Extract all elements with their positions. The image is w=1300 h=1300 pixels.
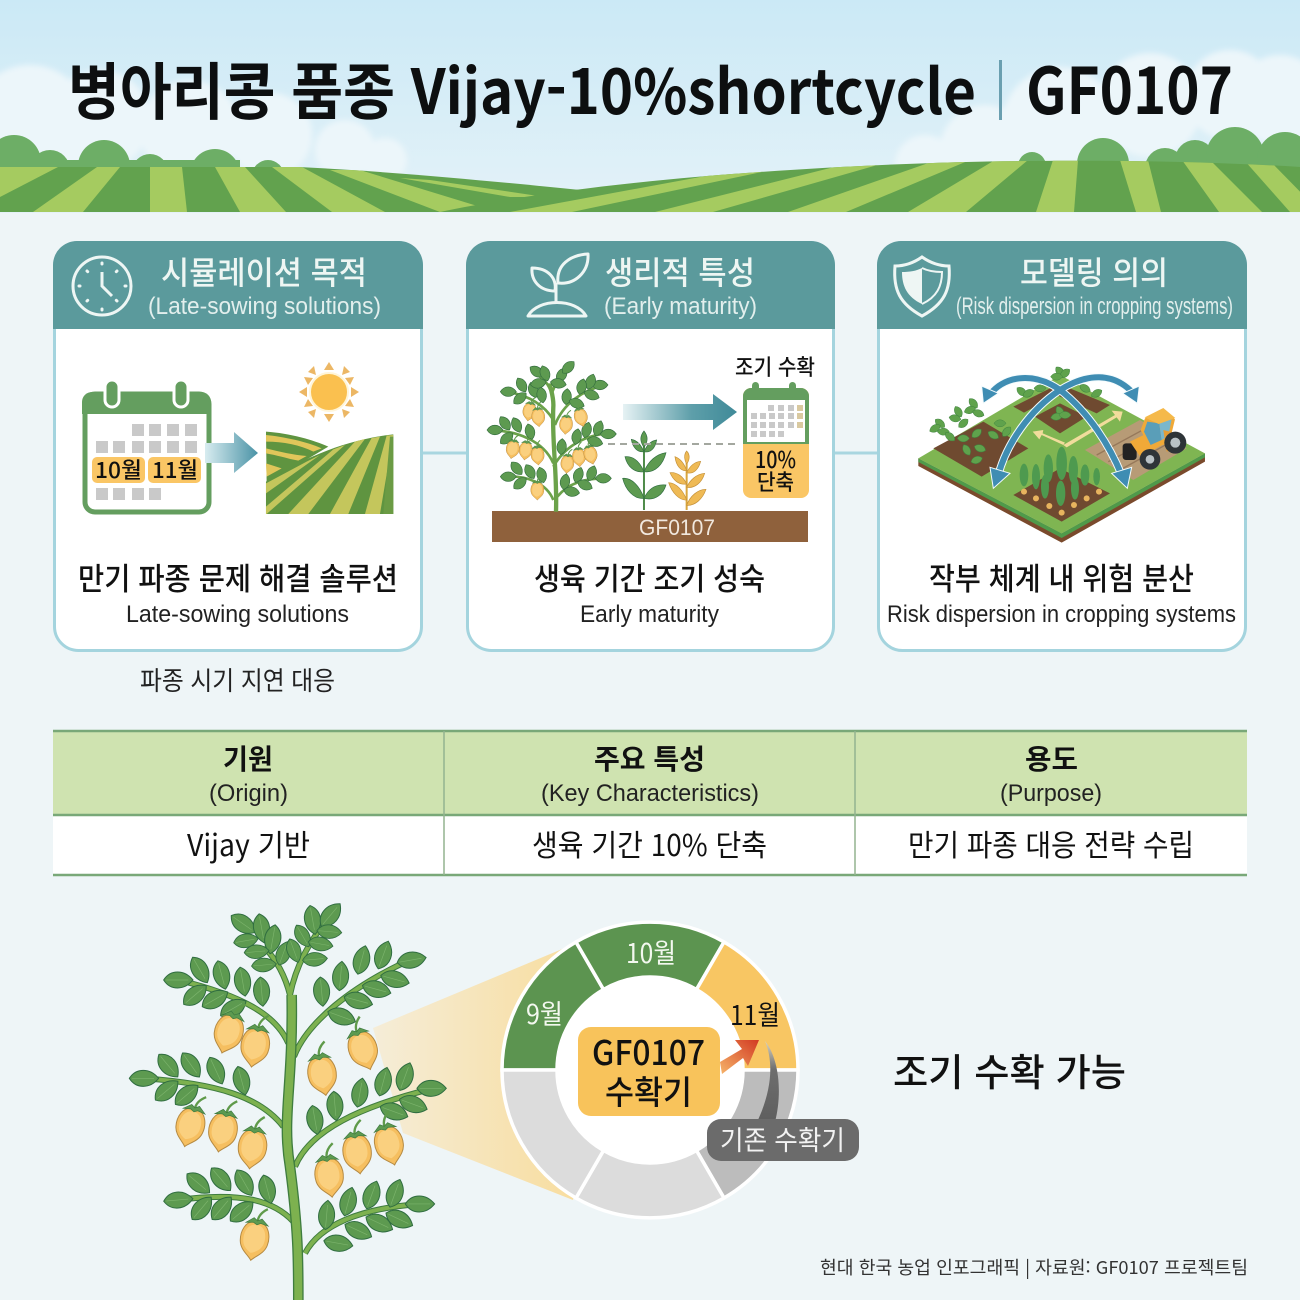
card subheading: (Late-sowing solutions) (148, 293, 381, 320)
column: purpose (908, 738, 1194, 865)
existing harvest label: 기존 수확기 (720, 1119, 845, 1158)
early harvest label: 조기 수확 (735, 350, 815, 382)
tractor (1123, 408, 1186, 470)
early harvest statement: 조기 수확 가능 (893, 1042, 1126, 1097)
segment: November (696, 942, 798, 1070)
row crop plants (1020, 447, 1100, 506)
panel: modeling significance (877, 241, 1247, 650)
soil label: GF0107 (639, 515, 715, 540)
tree lines (0, 127, 1300, 199)
footer credit: 현대 한국 농업 인포그래픽 | 자료원: GF0107 프로젝트팀 (820, 1254, 1248, 1280)
field illustration (266, 432, 393, 514)
connector lines between cards (422, 452, 878, 454)
isometric farm illustration (918, 365, 1205, 543)
column: origin: Vijay 기반 (187, 821, 310, 865)
pale path arrows (1033, 411, 1123, 447)
card English caption: Early maturity (580, 601, 719, 628)
column: key characteristics (532, 738, 767, 865)
card English caption: Late-sowing solutions (126, 601, 349, 628)
GF0107 harvest box: 수확기 (605, 1066, 692, 1114)
mini calendar with 10% shortening: 단축 (757, 465, 794, 497)
mini calendar with 10% shortening (743, 384, 809, 498)
segment: October (576, 922, 724, 990)
card heading: 생리적 특성 (605, 248, 755, 294)
left field (0, 167, 578, 212)
comparison table (53, 731, 1247, 875)
panel: simulation purpose (53, 241, 423, 650)
calendar icon (82, 380, 211, 512)
month labels: 11월 (730, 994, 780, 1033)
month labels: 9월 (526, 993, 563, 1032)
gray pointer to existing harvest (757, 1041, 779, 1122)
month labels: 10월 (626, 932, 676, 971)
header sky and farmland banner (0, 0, 1300, 215)
column: origin (187, 738, 310, 865)
icon: sprout (528, 254, 588, 316)
card heading: 모델링 의의 (1020, 248, 1168, 294)
height dashed guide (608, 443, 740, 445)
segment: September (502, 942, 604, 1070)
card subheading: (Early maturity) (604, 293, 757, 320)
icon: shield (895, 257, 949, 316)
card heading: 시뮬레이션 목적 (161, 248, 367, 294)
clouds (0, 50, 1300, 195)
card English caption: Risk dispersion in cropping systems (887, 601, 1236, 628)
GF0107 harvest box (578, 1026, 720, 1116)
mini calendar with 10% shortening: 10% (755, 441, 796, 475)
arrow (205, 432, 258, 473)
panel: physiological traits (466, 241, 835, 650)
icon: clock (73, 257, 131, 315)
calendar icon: 10월 (95, 453, 142, 485)
title: 병아리콩 품종 Vijay-10%shortcycle (68, 42, 976, 132)
calendar icon: 11월 (152, 453, 198, 485)
column: purpose: 용도 (1025, 738, 1078, 778)
icon: sun (299, 362, 359, 422)
GF0107 harvest box: GF0107 (592, 1026, 705, 1075)
large chickpea plant (129, 899, 446, 1300)
harvest calendar ring (502, 922, 798, 1218)
title: GF0107 (1026, 41, 1233, 133)
red arrow (720, 1040, 759, 1074)
green and yellow seedlings (623, 431, 706, 510)
growth arrow (623, 394, 737, 430)
column: key characteristics: 생육 기간 10% 단축 (532, 821, 767, 865)
column: origin: 기원 (223, 738, 273, 778)
card caption: 작부 체계 내 위험 분산 (929, 554, 1194, 599)
column: purpose: 만기 파종 대응 전략 수립 (908, 821, 1194, 865)
month labels (526, 932, 780, 1033)
highlight cone from plant to ring (373, 947, 600, 1200)
card caption: 생육 기간 조기 성숙 (534, 554, 765, 599)
column: origin: (Origin) (209, 780, 288, 807)
soil band (492, 511, 808, 542)
right field (440, 160, 1300, 212)
chickpea plant (487, 358, 616, 512)
column: key characteristics: (Key Characteristics) (541, 780, 759, 807)
crossing blue arrows (989, 377, 1133, 475)
column: purpose: (Purpose) (1000, 780, 1102, 807)
column: key characteristics: 주요 특성 (594, 738, 705, 778)
note below first card: 파종 시기 지연 대응 (140, 661, 335, 698)
card caption: 만기 파종 문제 해결 솔루션 (78, 554, 398, 599)
